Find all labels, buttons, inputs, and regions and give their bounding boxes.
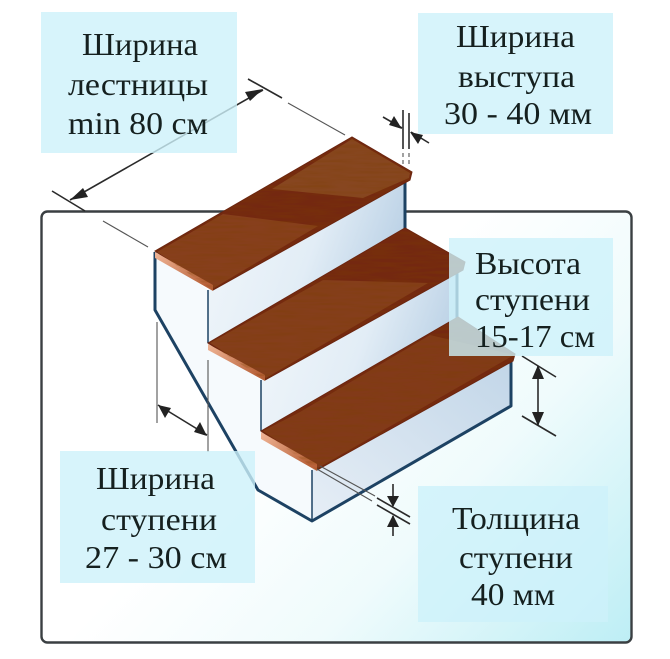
middle riser — [261, 268, 457, 431]
callout: step width: Ширина — [96, 460, 215, 496]
bottom tread — [261, 317, 515, 471]
callout: tread thickness: 40 мм — [471, 576, 555, 612]
top tread — [155, 137, 412, 291]
callout: step width: 27 - 30 см — [85, 539, 227, 575]
callout: step width: ступени — [101, 501, 217, 537]
bottom riser — [312, 360, 511, 521]
staircase illustration — [150, 130, 520, 521]
callout: staircase width: лестницы — [68, 66, 208, 102]
dimension: step height — [522, 356, 556, 436]
callout: step height: ступени — [475, 281, 590, 317]
callout: overhang width: выступа — [458, 58, 575, 94]
callout: staircase width: min 80 см — [68, 105, 208, 141]
callout: tread thickness: ступени — [459, 539, 573, 575]
dimension: staircase width — [52, 79, 345, 247]
stair outline — [155, 252, 511, 521]
callout: overhang width — [418, 13, 613, 134]
middle tread — [208, 228, 465, 381]
frame panel — [42, 212, 632, 642]
callout: tread thickness — [418, 486, 608, 622]
wood grain texture — [166, 146, 460, 470]
callout: step width — [60, 451, 255, 583]
callout: overhang width: 30 - 40 мм — [444, 95, 592, 131]
callout: step height: 15-17 см — [475, 318, 595, 354]
stair side wall — [155, 252, 312, 521]
callout: staircase width: Ширина — [82, 26, 198, 62]
top riser — [208, 180, 405, 343]
callout: step height — [449, 238, 613, 356]
dimension: overhang width — [383, 110, 429, 166]
callout: staircase width — [41, 12, 237, 153]
callout: overhang width: Ширина — [456, 18, 575, 54]
callout: tread thickness: Толщина — [452, 500, 580, 536]
dimension: tread thickness — [317, 466, 410, 536]
callout: step height: Высота — [475, 245, 581, 281]
dimension: step width — [157, 322, 208, 452]
